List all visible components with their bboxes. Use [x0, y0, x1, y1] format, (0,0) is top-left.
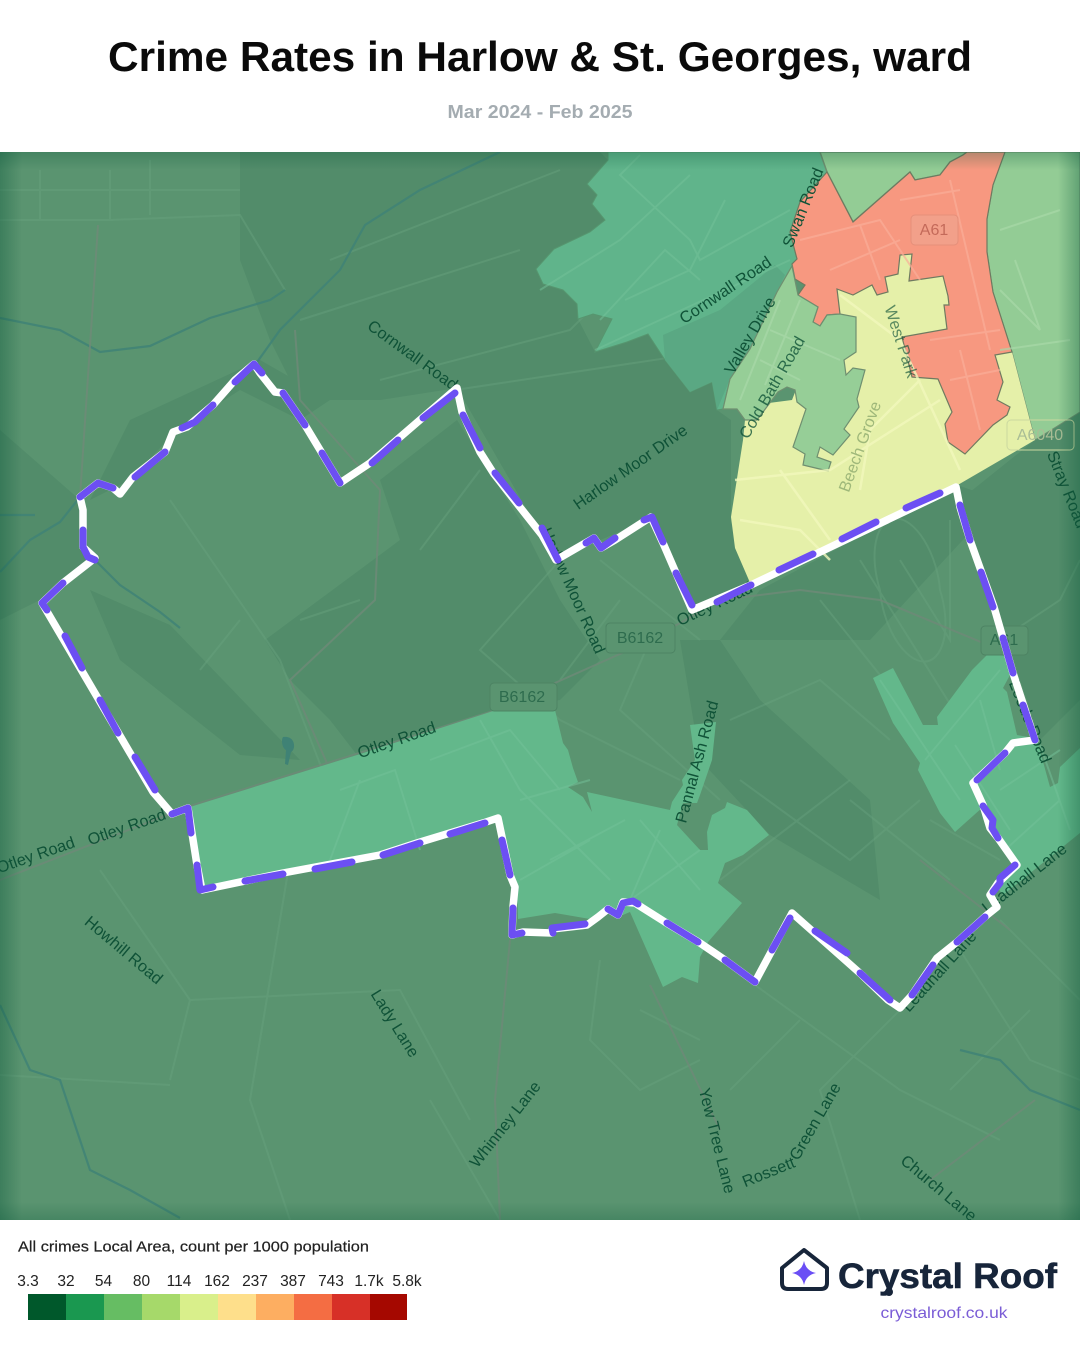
legend scale labels: 1.7k	[354, 1273, 384, 1290]
darker woodland patches	[0, 152, 1080, 900]
road label: Leadhall Lane east: Leadhall Lane	[979, 840, 1070, 917]
boundary white line	[42, 364, 1035, 1008]
road label: Cold Bath Road: Cold Bath Road	[736, 333, 809, 442]
road label: Otley Road centre: Otley Road	[355, 719, 438, 762]
boundary lines and main road	[0, 225, 1035, 1220]
road label: Otley Road west: Otley Road	[85, 806, 168, 849]
road shield: B6162 west: B6162	[499, 689, 545, 706]
crime area: south-east green	[973, 740, 1080, 895]
road label: Beech Grove: Beech Grove	[836, 399, 885, 494]
road label: West Park: West Park	[881, 303, 921, 381]
legend scale labels: 387	[280, 1273, 306, 1290]
road shield: B6162 east: B6162	[617, 630, 663, 647]
road shield: A6040	[1007, 420, 1074, 450]
crime area: north light green	[820, 152, 967, 222]
road shield: A61 north	[911, 215, 958, 245]
road label: Howhill Road: Howhill Road	[81, 913, 166, 988]
woodland inside north-west green	[663, 265, 785, 410]
road shield: A61 south	[981, 626, 1028, 655]
legend scale labels: 743	[318, 1273, 344, 1290]
crime area: pale yellow	[723, 250, 1035, 585]
road label: Rossett: Rossett	[740, 1153, 798, 1191]
ward boundary	[42, 364, 1035, 1008]
road label: Harlow Moor Road: Harlow Moor Road	[537, 525, 608, 656]
road label: Whinney Lane: Whinney Lane	[466, 1078, 545, 1171]
legend scale labels: 54	[95, 1273, 112, 1290]
legend colour bar	[28, 1294, 407, 1320]
title: Crime Rates in Harlow & St. Georges, ward	[108, 33, 972, 80]
legend scale labels: 3.3	[17, 1273, 39, 1290]
icon: crystal star	[792, 1261, 816, 1285]
road label: Leeds Road: Leeds Road	[1005, 678, 1054, 766]
road label: Church Lane: Church Lane	[897, 1152, 980, 1225]
legend title: All crimes Local Area, count per 1000 population	[18, 1238, 369, 1256]
edge vignette	[0, 152, 1080, 1220]
road label: Otley Road near boundary: Otley Road	[674, 579, 755, 630]
road label: Cornwall Road east: Cornwall Road	[676, 253, 775, 328]
crime area: Cold Bath light green	[723, 266, 865, 471]
road label: Green Lane: Green Lane	[786, 1080, 845, 1163]
logo: Crystal Roof	[782, 1250, 1057, 1296]
crime area: east green	[873, 653, 1033, 832]
map base	[0, 152, 1080, 1220]
road label: Cornwall Road west: Cornwall Road	[364, 317, 461, 394]
icon: house outline	[782, 1250, 827, 1289]
pond	[282, 737, 294, 765]
road shield: B6162 east	[606, 623, 675, 653]
road detail in pale and salmon areas	[735, 295, 960, 560]
road label: Pannal Ash Road: Pannal Ash Road	[672, 699, 722, 825]
legend scale labels: 5.8k	[392, 1273, 422, 1290]
road label: Harlow Moor Drive: Harlow Moor Drive	[570, 421, 691, 513]
crime area: north-west green	[536, 152, 827, 410]
crime area: salmon high-crime	[790, 152, 1012, 454]
road label: Leadhall Lane west: Leadhall Lane	[899, 927, 980, 1016]
rivers	[0, 152, 1080, 1218]
road shield: B6162 west	[490, 683, 557, 711]
road detail inside coloured areas	[330, 155, 1070, 900]
subtitle: date range: Mar 2024 - Feb 2025	[448, 102, 632, 122]
legend scale labels: 32	[57, 1273, 75, 1290]
legend scale labels: 237	[242, 1273, 268, 1290]
crime area: south green	[190, 703, 769, 987]
road label: Valley Drive: Valley Drive	[721, 294, 780, 377]
logo wordmark: Crystal Roof	[838, 1257, 1057, 1296]
road label: Swan Road: Swan Road	[779, 165, 827, 250]
crime area: east light green	[987, 152, 1080, 440]
road shield: A61 north: A61	[920, 222, 948, 239]
legend scale labels: 162	[204, 1273, 230, 1290]
road label: Yew Tree Lane: Yew Tree Lane	[695, 1086, 738, 1195]
website url: crystalroof.co.uk	[880, 1305, 1009, 1322]
legend scale labels	[17, 1273, 422, 1290]
road shield: A61 south: A61	[990, 632, 1018, 649]
minor roads	[0, 160, 1080, 1220]
legend scale labels: 114	[167, 1273, 192, 1290]
road shield: A6040: A6040	[1017, 427, 1063, 444]
legend scale labels: 80	[133, 1273, 150, 1290]
map panel	[0, 152, 1080, 1225]
icon: y descender dot	[885, 1288, 893, 1296]
boundary purple dashes	[42, 364, 1035, 1000]
road label: Lady Lane: Lady Lane	[367, 987, 422, 1061]
